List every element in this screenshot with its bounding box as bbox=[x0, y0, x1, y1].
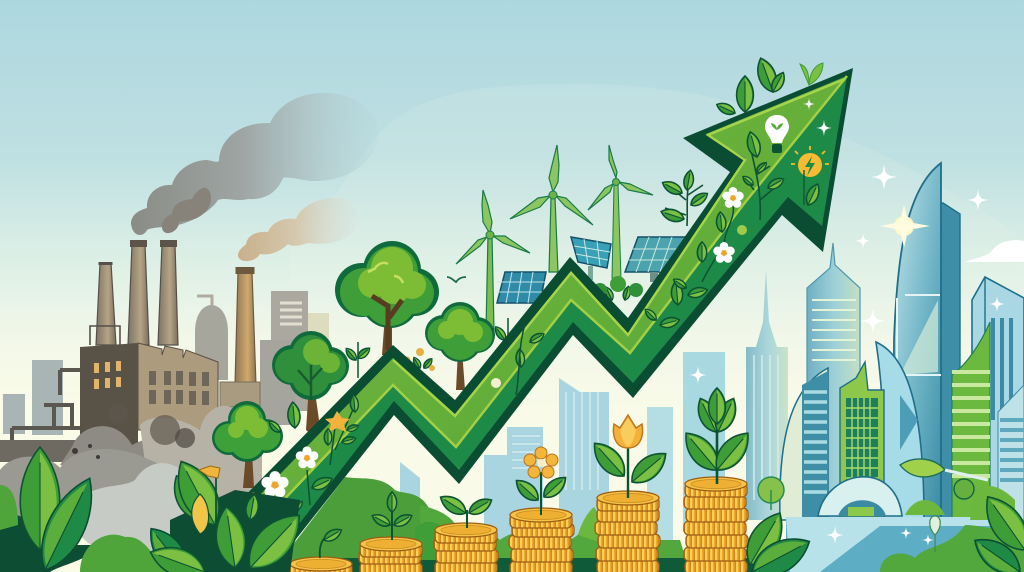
foreground left leaves bbox=[20, 447, 106, 572]
coin stack 3 bbox=[434, 523, 498, 572]
arrow top leaves bbox=[715, 55, 823, 117]
smoke plume: left stacks bbox=[131, 93, 378, 235]
chimney A bbox=[90, 262, 120, 345]
solar panel left bbox=[497, 272, 546, 303]
wind turbine 1 bbox=[456, 190, 530, 330]
foreground right bushes and leaves bbox=[880, 486, 1024, 572]
right tower bbox=[972, 277, 1024, 520]
sprout on stack 3 bbox=[437, 491, 495, 528]
sprout on stack 1 bbox=[320, 526, 344, 558]
green growth arrow bbox=[170, 68, 853, 572]
coin stack 2 bbox=[359, 537, 422, 572]
sky light swoosh bbox=[290, 84, 1024, 572]
chimney D bbox=[220, 267, 260, 407]
cloud right bbox=[965, 240, 1024, 262]
coin stack 5 bbox=[595, 491, 660, 572]
sparkles near city bbox=[855, 164, 989, 334]
foreground left green bump bbox=[0, 485, 170, 572]
polluted smog clouds bbox=[0, 404, 262, 552]
flower plant on stack 4 bbox=[512, 447, 570, 515]
lamp leaf structure bbox=[900, 459, 988, 480]
main glass skyscraper bbox=[880, 163, 960, 520]
foreground right of stack leaves bbox=[738, 506, 816, 572]
tree big bbox=[335, 241, 439, 355]
eco-city foreground buildings bbox=[780, 322, 1024, 520]
coin stack 6 bbox=[684, 477, 748, 572]
wind turbine 2 bbox=[510, 145, 593, 272]
tree medium bbox=[425, 302, 495, 390]
tree left lower bbox=[212, 401, 283, 488]
factory building bbox=[0, 343, 218, 462]
tall city tower, cream top bbox=[807, 243, 860, 520]
solar panel right bbox=[625, 237, 685, 282]
back factory buildings bbox=[3, 291, 329, 435]
small city tree bbox=[758, 477, 974, 510]
energy sun icon bbox=[791, 146, 829, 177]
leafy plant on stack 6 bbox=[678, 388, 756, 484]
light bulb icon bbox=[765, 115, 789, 153]
left arrow plants and flowers bbox=[242, 395, 359, 520]
wind turbine 3 bbox=[588, 145, 653, 278]
chimney C bbox=[158, 240, 178, 345]
tulip plant on stack 5 bbox=[587, 415, 672, 498]
tree left upper bbox=[272, 331, 349, 436]
plant above arrow right of panels bbox=[659, 169, 710, 226]
glass dome bbox=[818, 477, 902, 516]
bird bbox=[447, 277, 466, 282]
bushes behind coins bbox=[340, 505, 780, 572]
coin stack 4 bbox=[509, 508, 574, 572]
chimney B bbox=[128, 240, 149, 345]
coin stack 1 bbox=[290, 557, 352, 572]
sprout on stack 2 bbox=[370, 492, 414, 540]
foreground green hill bbox=[272, 477, 430, 572]
arrow sparkles bbox=[803, 98, 832, 136]
small valley plants bbox=[344, 276, 643, 385]
smoke plume: right stack bbox=[238, 198, 358, 261]
background city skyline bbox=[400, 270, 788, 572]
sapling on plaza bbox=[930, 516, 940, 552]
foreground left dark bush bbox=[0, 512, 100, 572]
water plaza bbox=[786, 517, 1000, 572]
arrow vines and leaves bbox=[491, 130, 823, 395]
foreground centre plant cluster bbox=[141, 454, 311, 572]
solar panel middle bbox=[571, 237, 611, 280]
